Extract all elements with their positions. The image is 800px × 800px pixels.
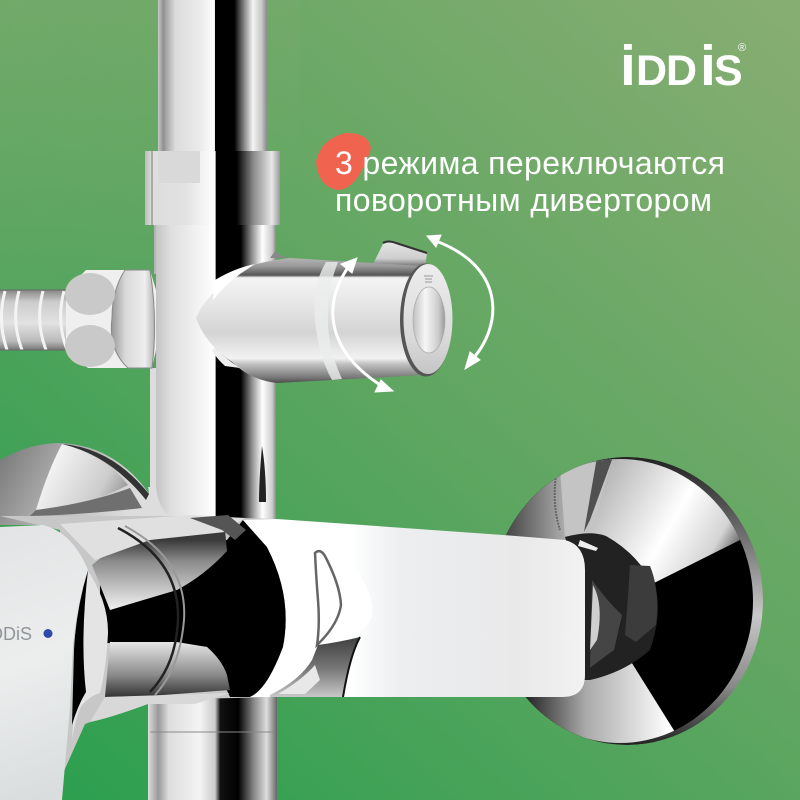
right wall flange	[506, 457, 763, 745]
ring edge	[118, 528, 178, 692]
caption line 2: поворотным дивертором	[335, 182, 712, 218]
hexagonal nut	[565, 533, 658, 680]
chrome lobe beside handle	[72, 568, 108, 740]
coral blob	[316, 133, 371, 190]
lower bright strip	[90, 693, 230, 722]
bright strips above	[60, 515, 245, 560]
caption text	[335, 145, 725, 218]
teardrop slot	[315, 551, 341, 645]
logo wordmark: S	[714, 47, 743, 95]
hose and fitting nut	[0, 270, 156, 368]
flange left sector	[506, 461, 597, 706]
mixer central body	[0, 515, 286, 780]
flange upper sector	[590, 459, 740, 582]
white highlights on the tip	[213, 264, 255, 300]
diverter lever	[373, 242, 427, 275]
logo wordmark: i	[700, 34, 716, 98]
logo wordmark: i	[620, 34, 636, 98]
body base	[0, 516, 277, 780]
cylinder upper reflection	[92, 530, 227, 610]
dark reflection	[100, 520, 286, 697]
diverter end cap	[400, 264, 452, 376]
logo wordmark: D	[636, 47, 667, 95]
black crescent	[72, 570, 88, 725]
arrow: left arc	[333, 258, 393, 392]
IDDIS logo	[620, 34, 746, 98]
blue dot	[44, 629, 52, 638]
caption line 1: 3 режима переключаются	[335, 145, 725, 181]
left wall flange	[0, 443, 150, 525]
cylinder lower reflection	[105, 642, 230, 697]
shower column: upper pipe, collar and stem	[142, 0, 290, 520]
rotating band	[314, 262, 342, 380]
handle face	[0, 525, 88, 800]
mixer bar	[243, 519, 585, 697]
registered mark: ®	[738, 42, 746, 54]
flange lower sector	[526, 663, 674, 743]
tube reflection	[560, 457, 613, 536]
rotation arrows	[333, 235, 493, 392]
diverter body	[196, 258, 424, 383]
mixer handle	[0, 525, 108, 800]
lower column	[148, 695, 277, 800]
rotary diverter	[196, 242, 452, 383]
chrome reflection under the slot	[270, 637, 360, 697]
logo wordmark: D	[666, 47, 697, 95]
arrow: right arc	[427, 235, 493, 369]
soft crest on bar	[309, 545, 372, 645]
